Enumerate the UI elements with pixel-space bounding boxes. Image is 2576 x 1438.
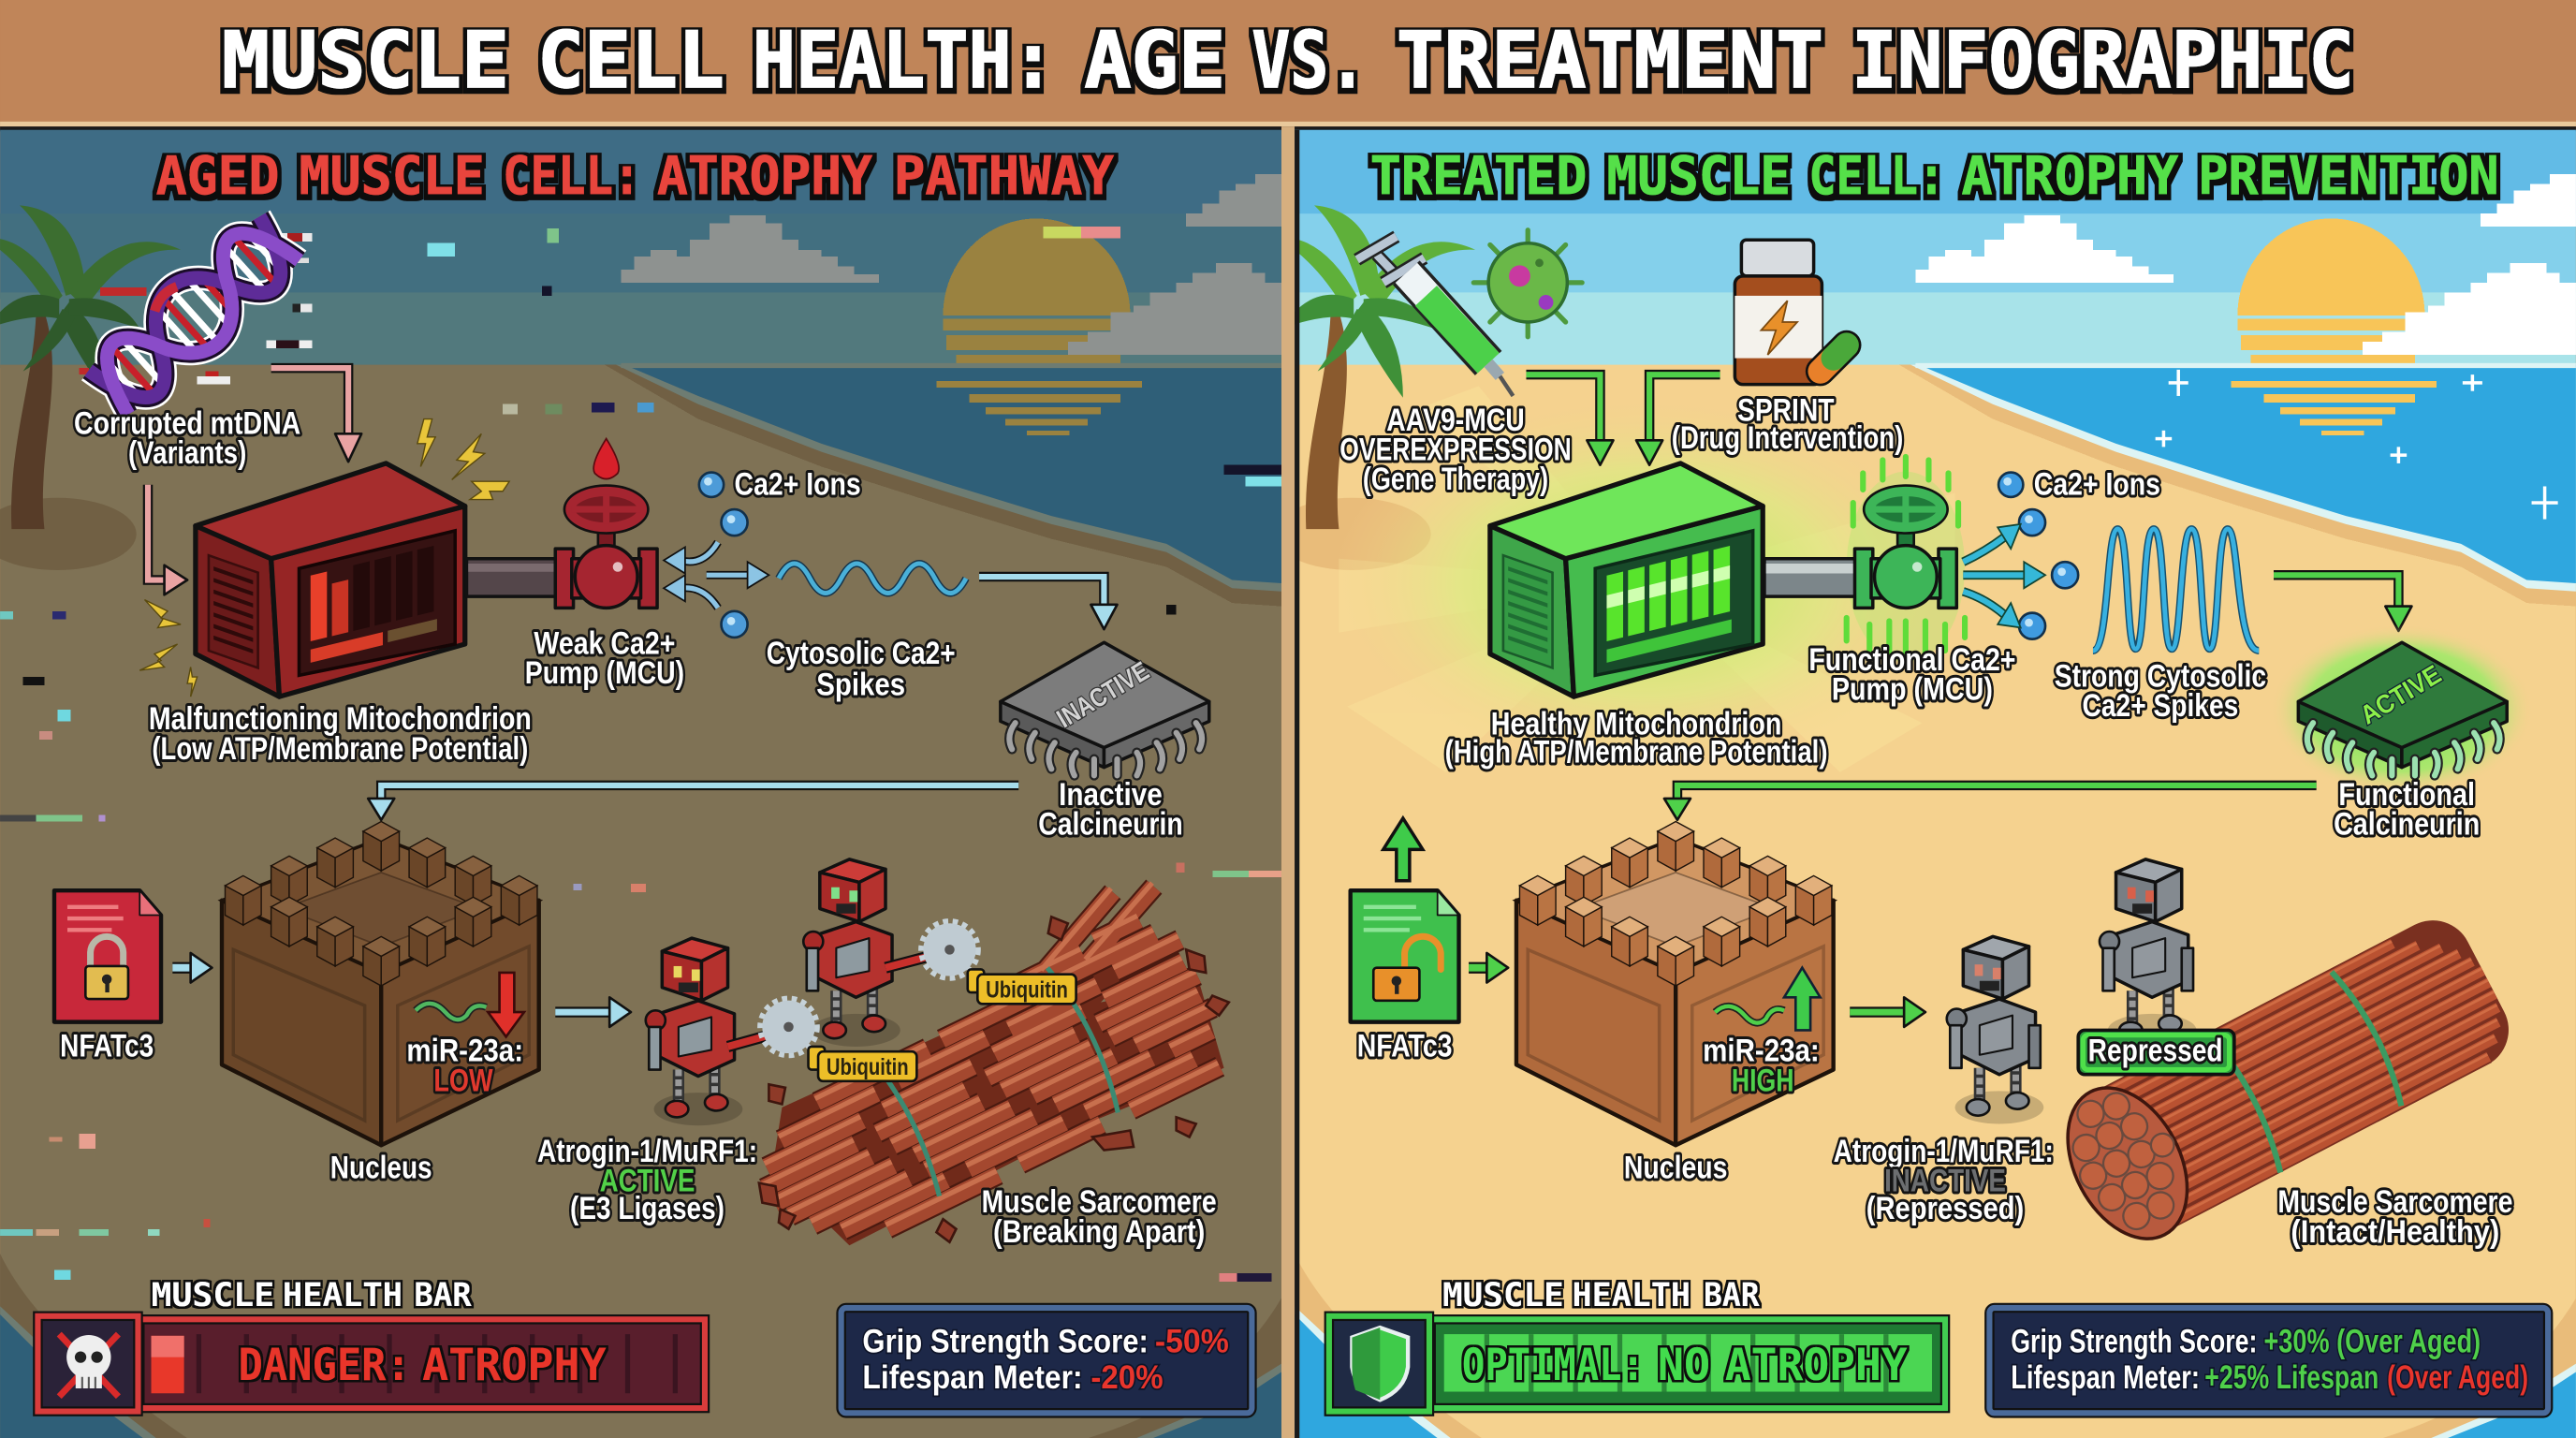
subtitle: treated: CELL: <box>1808 146 1945 207</box>
label: SPRINT <box>1672 392 1903 456</box>
label: intact sarcomere: (Intact/Healthy) <box>2291 1214 2499 1250</box>
arrow: calcineurin to nucleus <box>1664 785 2317 820</box>
icon: miR-23a high <box>1715 968 1821 1030</box>
title: AGE <box>1084 16 1225 106</box>
icon: nucleus castle <box>222 822 539 1145</box>
icon: active ligase robot upper <box>803 859 976 1047</box>
label: nucleus: Nucleus <box>330 1150 432 1185</box>
label: healthy mitochondrion: (High ATP/Membrane Potential) <box>1445 734 1828 770</box>
health bar: danger: DANGER: <box>239 1340 411 1391</box>
label: healthy mitochondrion: Healthy Mitochondrion <box>1491 706 1781 741</box>
icon: shield badge <box>1329 1316 1429 1412</box>
icon: Ca2+ ions <box>1998 473 2078 639</box>
icon: active calcineurin chip: ACTIVE <box>2355 659 2446 730</box>
icon: locked NFATc3 document <box>54 890 161 1022</box>
label: cytosolic spikes <box>767 636 956 702</box>
tag: ubiquitin upper: Ubiquitin <box>986 977 1068 1003</box>
stats panel: aged: -20% <box>1090 1359 1164 1396</box>
background: sunny beach scene <box>1273 130 2576 1438</box>
label: gene therapy: OVEREXPRESSION <box>1339 432 1572 467</box>
icon: AAV9 syringe <box>1357 237 1513 396</box>
label: muscle health bar: MUSCLE <box>1442 1276 1564 1314</box>
tag: ubiquitin lower: Ubiquitin <box>827 1055 909 1080</box>
label: strong spikes <box>2055 659 2266 724</box>
subtitle: aged: PATHWAY <box>894 146 1114 207</box>
arrows: strong ion flow <box>1963 524 2045 627</box>
label: intact sarcomere <box>2277 1184 2512 1250</box>
subtitle: treated: ATROPHY <box>1962 146 2178 207</box>
icon: functional pump valve <box>1854 486 1956 608</box>
label: inactive ligases: Atrogin-1/MuRF1: <box>1834 1134 2054 1169</box>
arrow: nucleus to ligases <box>555 997 631 1027</box>
label: nucleus: Nucleus <box>1624 1150 1727 1185</box>
label: NFATc3: NFATc3 <box>1357 1028 1453 1064</box>
icon: active calcineurin chip <box>2271 624 2533 795</box>
stats panel: treated: Lifespan Meter: <box>2011 1359 2200 1396</box>
health bar: optimal: OPTIMAL: <box>1462 1340 1645 1391</box>
health bar: danger: ATROPHY <box>422 1340 607 1391</box>
label: functional calcineurin: Calcineurin <box>2334 807 2480 843</box>
stats panel: aged: Lifespan Meter: <box>862 1359 1083 1396</box>
subtitle: treated: PREVENTION <box>2198 146 2498 207</box>
label: malfunctioning mitochondrion <box>149 701 532 767</box>
label: malfunctioning mitochondrion: Malfunctioning Mitochondrion <box>149 701 532 737</box>
stats panel: treated: +25% Lifespan <box>2204 1359 2378 1396</box>
icon: broken sarcomere <box>712 871 1237 1269</box>
icon: AAV9 virus <box>1473 230 1582 337</box>
health bar: danger <box>139 1319 705 1408</box>
label: inactive ligases <box>1834 1134 2054 1226</box>
label: inactive calcineurin <box>1038 777 1183 843</box>
label: functional pump: Functional Ca2+ <box>1808 642 2015 678</box>
sea sparkles <box>2156 370 2558 520</box>
label: miR-23a low: LOW <box>433 1063 493 1098</box>
label: weak pump: Pump (MCU) <box>525 655 684 691</box>
label: functional calcineurin <box>2334 777 2480 843</box>
label: healthy mitochondrion <box>1445 706 1828 770</box>
icon: nucleus castle <box>1516 822 1834 1145</box>
label: inactive ligases: INACTIVE <box>1884 1163 2006 1198</box>
label: Ca2+ ions: Ca2+ Ions <box>2034 466 2160 502</box>
arrow: NFATc3 to nucleus <box>172 953 212 983</box>
label: gene therapy <box>1339 403 1572 497</box>
label: miR-23a high <box>1703 1034 1820 1098</box>
label: corrupted mtDNA: (Variants) <box>128 435 246 471</box>
arrows: weak ion flow <box>664 542 768 608</box>
icon: SPRINT pill bottle <box>1734 240 1847 385</box>
stats panel: treated: (Over Aged) <box>2387 1359 2528 1396</box>
stats panel: aged: -50% <box>1155 1323 1229 1359</box>
label: breaking sarcomere: Muscle Sarcomere <box>982 1184 1217 1220</box>
label: breaking sarcomere <box>982 1184 1217 1250</box>
icon: sparks <box>139 419 509 697</box>
arrow: NFATc3 up <box>1383 818 1423 881</box>
glitch artifacts <box>0 227 1281 1282</box>
arrow: spikes to calcineurin <box>2274 575 2411 631</box>
icon: corrupted DNA helix <box>83 211 304 420</box>
arrow: variants to mitochondrion <box>148 485 187 594</box>
stats panel: aged <box>842 1308 1251 1413</box>
icon: weak pump valve <box>555 486 657 608</box>
label: muscle health bar: HEALTH <box>1573 1276 1690 1314</box>
icon: blood drop <box>593 439 619 479</box>
tag: repressed <box>2078 1030 2234 1075</box>
pipe <box>1764 559 1863 596</box>
background: dusk beach scene <box>0 130 1281 1438</box>
icon: malfunctioning mitochondrion <box>196 463 465 697</box>
subtitle: aged: MUSCLE <box>299 146 485 207</box>
label: functional pump: Pump (MCU) <box>1832 672 1993 708</box>
icon: unlocked NFATc3 document <box>1351 890 1459 1022</box>
label: NFATc3: NFATc3 <box>60 1028 154 1064</box>
icon: inactive calcineurin chip <box>1001 642 1209 775</box>
arrow: mtDNA to mitochondrion <box>271 368 361 462</box>
subtitle: aged: CELL: <box>503 146 641 207</box>
label: corrupted mtDNA: Corrupted mtDNA <box>74 405 300 441</box>
stats panel: aged: Grip Strength Score: <box>862 1323 1149 1359</box>
label: cytosolic spikes: Spikes <box>816 667 905 702</box>
tag: repressed: Repressed <box>2088 1034 2223 1069</box>
label: weak pump: Weak Ca2+ <box>534 626 675 662</box>
subtitle: treated: TREATED <box>1370 146 1587 207</box>
label: malfunctioning mitochondrion: (Low ATP/Membrane Potential) <box>152 731 528 767</box>
icon: healthy mitochondrion <box>1490 463 1763 697</box>
label: miR-23a high: miR-23a: <box>1703 1034 1820 1069</box>
label: muscle health bar: BAR <box>1704 1276 1761 1314</box>
label: muscle health bar: MUSCLE <box>152 1276 274 1314</box>
health bar: optimal <box>1431 1319 1945 1408</box>
arrow: drug to mitochondrion <box>1636 374 1720 465</box>
stats panel: treated <box>1989 1308 2548 1413</box>
icon: skull badge <box>37 1316 138 1412</box>
icon: inactive ligase robot upper <box>2100 859 2197 1047</box>
health bar: optimal: NO <box>1658 1340 1710 1391</box>
label: cytosolic spikes: Cytosolic Ca2+ <box>767 636 956 671</box>
label: gene therapy: AAV9-MCU <box>1386 403 1525 438</box>
title: CELL <box>537 16 724 106</box>
label: SPRINT: (Drug Intervention) <box>1672 420 1903 456</box>
arrow: NFATc3 to nucleus <box>1469 953 1508 983</box>
glow: mitochondrion and pump <box>1331 386 1965 772</box>
arrow: gene therapy to mitochondrion <box>1526 374 1613 465</box>
icon: miR-23a low <box>416 973 524 1036</box>
icon: active ligase robot lower <box>646 938 815 1125</box>
panel: treated muscle cell <box>1273 130 2576 1438</box>
label: intact sarcomere: Muscle Sarcomere <box>2277 1184 2512 1220</box>
label: miR-23a high: HIGH <box>1732 1063 1794 1098</box>
title: INFOGRAPHIC <box>1852 16 2354 106</box>
icon: inactive ligase robot lower <box>1947 936 2043 1123</box>
label: gene therapy: (Gene Therapy) <box>1363 462 1548 497</box>
label: muscle health bar: HEALTH <box>283 1276 402 1314</box>
label: active ligases: Atrogin-1/MuRF1: <box>537 1134 757 1169</box>
chart: weak cytosolic calcium wave <box>779 564 966 594</box>
pipe <box>466 559 562 596</box>
label: miR-23a low <box>406 1034 523 1098</box>
label: strong spikes: Strong Cytosolic <box>2055 659 2266 695</box>
icon: intact sarcomere <box>2043 905 2523 1259</box>
label: functional calcineurin: Functional <box>2338 777 2475 813</box>
label: SPRINT: SPRINT <box>1737 392 1835 428</box>
label: active ligases: ACTIVE <box>600 1163 695 1198</box>
icon: inactive calcineurin chip: INACTIVE <box>1052 656 1154 733</box>
label: weak pump <box>525 626 684 691</box>
label: functional pump <box>1808 642 2015 708</box>
label: active ligases <box>537 1134 757 1226</box>
label: corrupted mtDNA <box>74 405 300 471</box>
label: miR-23a low: miR-23a: <box>406 1034 523 1069</box>
arrow: nucleus to ligases <box>1850 997 1925 1027</box>
label: inactive calcineurin: Calcineurin <box>1038 807 1183 843</box>
tag: ubiquitin upper <box>968 969 1076 1004</box>
subtitle: aged: ATROPHY <box>657 146 872 207</box>
panel: aged muscle cell <box>0 130 1281 1438</box>
label: inactive ligases: (Repressed) <box>1866 1191 2024 1226</box>
chart: strong cytosolic calcium spikes <box>2093 529 2259 651</box>
health bar: optimal: ATROPHY <box>1725 1340 1908 1391</box>
arrow: calcineurin to nucleus <box>368 785 1018 820</box>
stats panel: treated: Grip Strength Score: <box>2011 1323 2257 1359</box>
label: strong spikes: Ca2+ Spikes <box>2083 688 2238 724</box>
icon: Ca2+ ions <box>699 473 748 638</box>
stats panel: treated: +30% (Over Aged) <box>2263 1323 2481 1359</box>
title: HEALTH: <box>753 16 1055 106</box>
tag: ubiquitin lower <box>809 1047 916 1081</box>
label: active ligases: (E3 Ligases) <box>570 1191 724 1226</box>
label: breaking sarcomere: (Breaking Apart) <box>993 1214 1205 1250</box>
label: muscle health bar: BAR <box>414 1276 473 1314</box>
title: MUSCLE <box>222 16 509 106</box>
title: TREATMENT <box>1397 16 1823 106</box>
title: VS. <box>1251 16 1367 106</box>
subtitle: treated: MUSCLE <box>1606 146 1791 207</box>
subtitle: aged: AGED <box>156 146 279 207</box>
arrow: spikes to calcineurin <box>979 577 1117 629</box>
label: Ca2+ ions: Ca2+ Ions <box>735 466 861 502</box>
label: inactive calcineurin: Inactive <box>1059 777 1163 813</box>
